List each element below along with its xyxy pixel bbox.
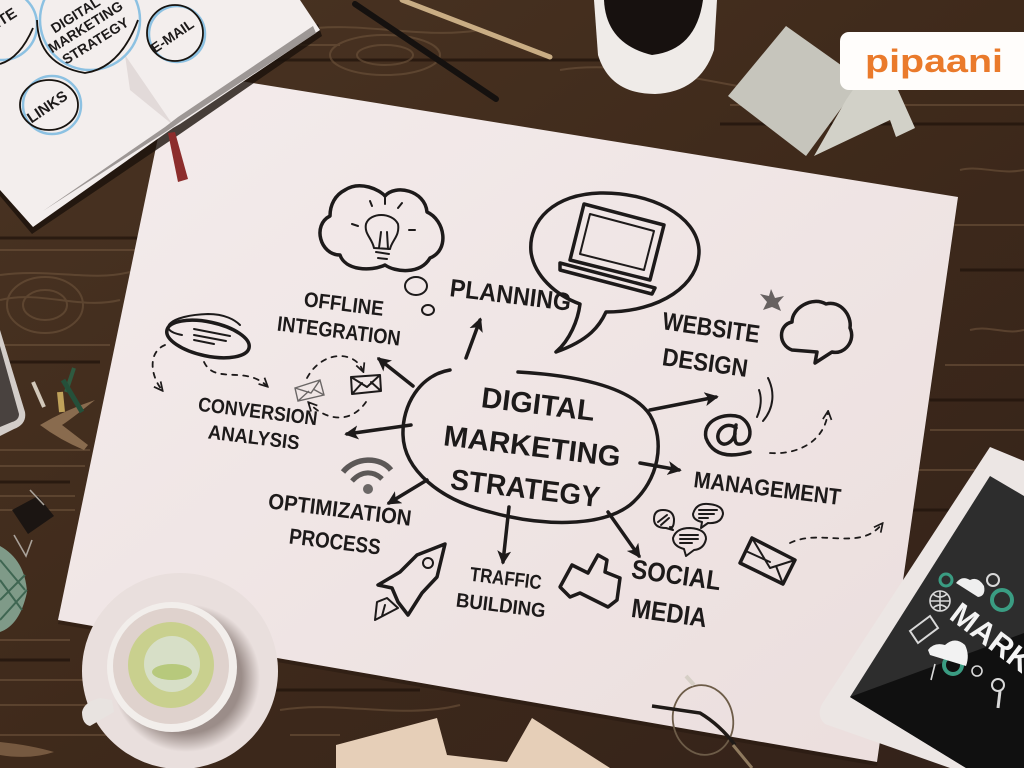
logo: pipaani: pipaani (865, 43, 1003, 79)
label: website design (661, 307, 762, 383)
notebook (0, 0, 322, 234)
icon: lightbulb cloud (320, 186, 443, 315)
icon: star and cloud chat (760, 289, 852, 363)
icon: thumbs up (560, 555, 620, 607)
icon: email envelope with dashed arrow (740, 524, 882, 584)
icon: wifi (343, 460, 391, 494)
label: offline integration (276, 288, 402, 351)
sticky notes (728, 26, 915, 156)
label: optimization process (267, 488, 413, 560)
label: optimization process: PROCESS (288, 524, 382, 560)
label: conversion analysis: ANALYSIS (207, 422, 301, 455)
central heading: STRATEGY (449, 464, 601, 514)
label: offline integration: INTEGRATION (276, 313, 402, 351)
label: offline integration: OFFLINE (303, 288, 385, 321)
icon: envelopes with dashed cycle (295, 356, 381, 418)
icon: speech bubbles (654, 504, 723, 556)
notebook: E-MAIL (148, 15, 197, 56)
label: website design: DESIGN (661, 343, 750, 383)
arrows (347, 320, 716, 562)
label: optimization process: OPTIMIZATION (267, 488, 413, 531)
label: social media: SOCIAL (630, 554, 723, 596)
label: conversion analysis: CONVERSION (197, 394, 319, 430)
icon: notepad ellipse with dashed arrows (153, 314, 267, 390)
label: social media (630, 554, 723, 633)
label: planning: PLANNING (448, 274, 573, 317)
label: traffic building (455, 564, 547, 622)
label: social media: MEDIA (630, 593, 709, 633)
label: traffic building: TRAFFIC (469, 564, 543, 594)
coffee cup with saucer (82, 573, 278, 768)
coffee cup top (594, 0, 717, 94)
label: website design: WEBSITE (661, 307, 762, 349)
label: management: MANAGEMENT (692, 466, 842, 510)
eyeglasses (652, 676, 752, 768)
label: conversion analysis (197, 394, 319, 455)
central heading (442, 382, 622, 514)
logo: pipaani (840, 32, 1024, 90)
pins and clips (0, 368, 82, 632)
beige cards at bottom (336, 718, 610, 768)
central heading: DIGITAL (480, 382, 597, 428)
central blob outline (403, 370, 658, 522)
paper sheet (58, 70, 958, 766)
notebook: STRATEGY (59, 14, 132, 67)
phone at left edge (0, 330, 25, 436)
icon: at sign with sound arcs and dashed arrow (706, 378, 828, 455)
pens (355, 0, 550, 99)
tablet (820, 447, 1024, 768)
label: traffic building: BUILDING (455, 590, 547, 622)
notebook: LINKS (24, 88, 71, 127)
icon: rocket (375, 544, 445, 620)
icon: laptop speech bubble (531, 193, 699, 352)
central heading: MARKETING (442, 420, 622, 474)
